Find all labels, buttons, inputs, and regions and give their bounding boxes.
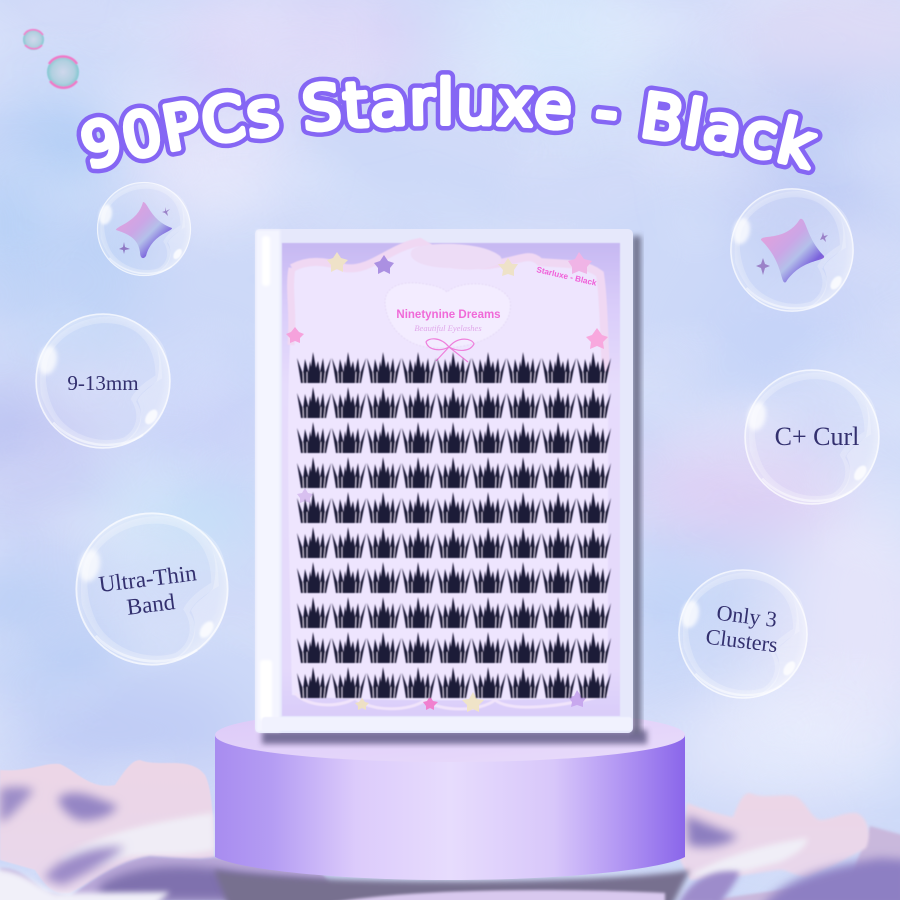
bubble: star right xyxy=(730,188,854,312)
label: Only 3 Clusters: Clusters xyxy=(704,624,779,657)
pedestal xyxy=(215,708,685,880)
mountains: lilac silk hills xyxy=(0,760,900,900)
card with ribbon border xyxy=(288,240,608,709)
bottom scallops xyxy=(295,693,608,709)
icon: iridescent star left xyxy=(116,202,172,258)
bubble: Only 3 Clusters xyxy=(678,569,808,699)
small iridescent bubbles xyxy=(23,29,79,88)
left hills xyxy=(0,760,214,893)
floor under pedestal xyxy=(214,870,690,900)
stars on card xyxy=(286,252,608,712)
title xyxy=(74,67,824,183)
case frame xyxy=(255,229,633,733)
bubble: star left xyxy=(97,182,191,276)
lash clusters: 9 columns by 10 rows xyxy=(297,352,611,698)
label: Ultra-Thin Band: Band xyxy=(125,589,177,620)
label: Only 3 Clusters: Only 3 xyxy=(715,600,778,632)
tray xyxy=(282,243,620,716)
lash case xyxy=(255,229,641,734)
bubble: 9-13mm xyxy=(35,313,171,449)
bubble: Ultra-Thin Band xyxy=(76,513,228,665)
icon: iridescent star right xyxy=(756,219,828,282)
label: Ultra-Thin Band: Ultra-Thin xyxy=(97,560,198,597)
label: C+ Curl: C+ Curl xyxy=(775,422,859,451)
right hills xyxy=(640,826,900,900)
bubble: C+ Curl xyxy=(744,369,880,505)
product label: Starluxe - Black xyxy=(536,265,598,288)
label: 9-13mm: 9-13mm xyxy=(67,371,139,395)
brand text: Ninetynine Dreams xyxy=(396,309,501,321)
icon: pink bow xyxy=(426,339,474,362)
brand tagline: Beautiful Eyelashes xyxy=(414,323,482,333)
